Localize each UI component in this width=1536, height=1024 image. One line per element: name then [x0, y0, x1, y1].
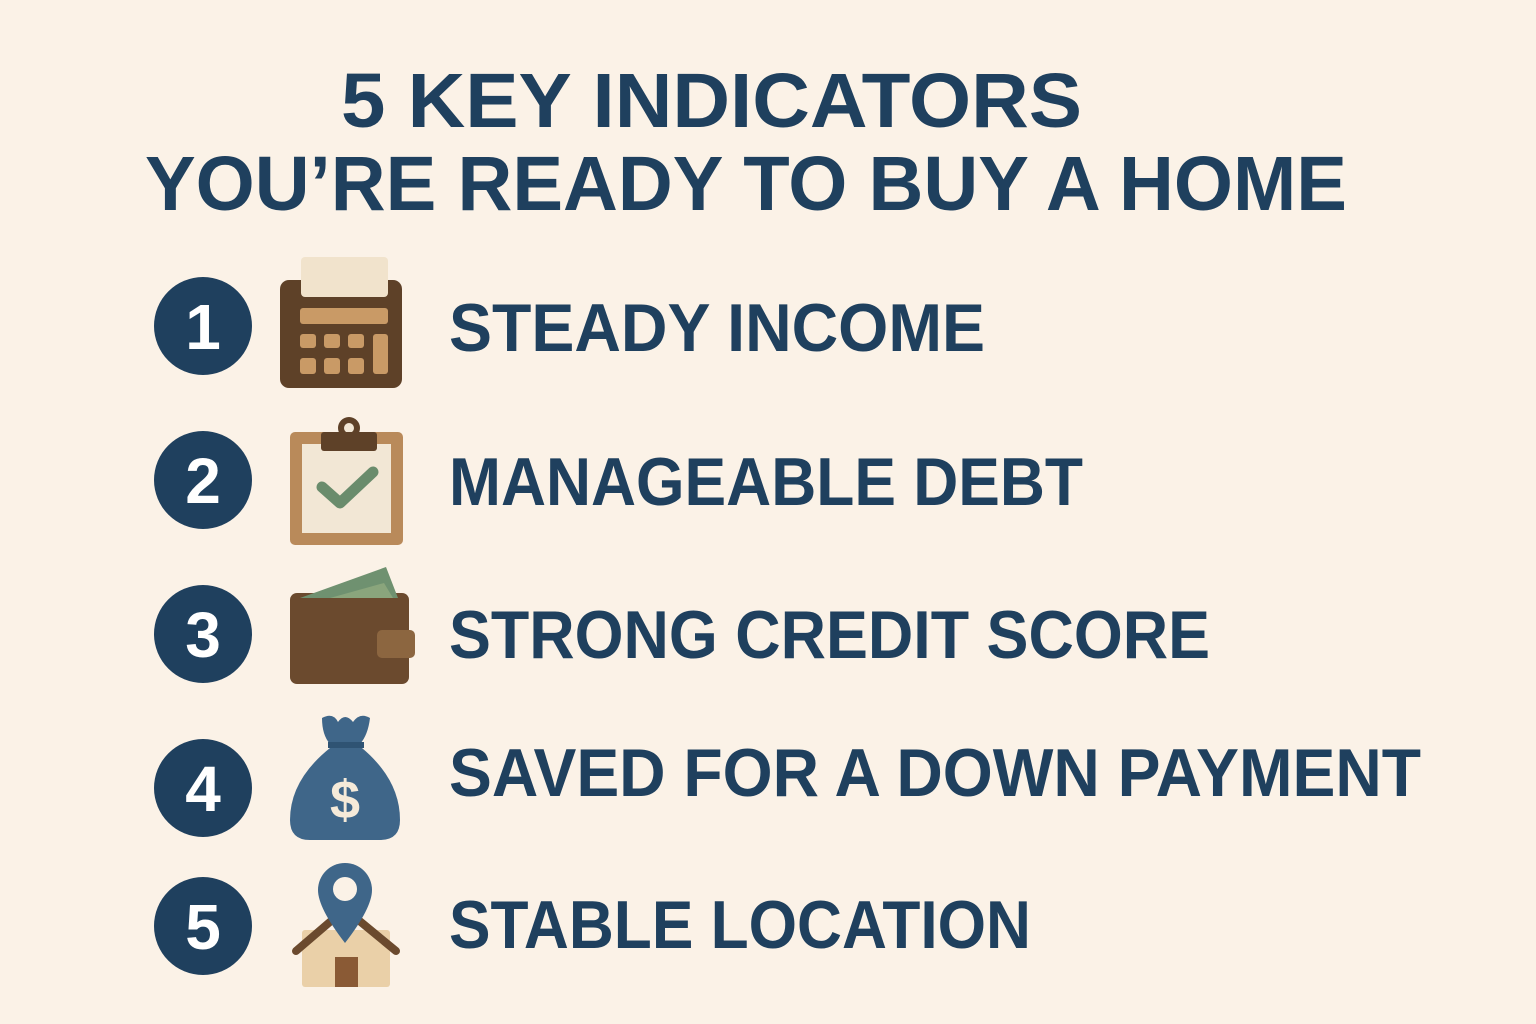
- item 2: manageable debt: [154, 417, 1083, 545]
- icon: clipboard: [290, 417, 403, 545]
- icon: money bag: [290, 716, 400, 840]
- title: [145, 58, 1347, 227]
- number badge 3: [154, 585, 252, 683]
- item 4: saved for a down payment: [154, 716, 1421, 840]
- item 5: stable location: [154, 863, 1031, 987]
- title: YOU’RE READY TO BUY A HOME: [145, 141, 1347, 227]
- label: stable location: STABLE LOCATION: [449, 887, 1031, 963]
- number badge 3: 3: [185, 599, 221, 671]
- label: strong credit score: STRONG CREDIT SCORE: [449, 597, 1210, 673]
- label: saved for a down payment: SAVED FOR A DOWN PAYMENT: [449, 735, 1421, 811]
- icon: house with pin: [296, 863, 396, 987]
- number badge 2: 2: [185, 445, 221, 517]
- number badge 2: [154, 431, 252, 529]
- icon: money bag: $: [330, 770, 360, 830]
- icon: calculator: [280, 257, 402, 388]
- number badge 4: 4: [185, 753, 221, 825]
- number badge 5: 5: [185, 891, 221, 963]
- number badge 5: [154, 877, 252, 975]
- title: 5 KEY INDICATORS: [341, 58, 1082, 144]
- number badge 1: 1: [185, 291, 221, 363]
- number badge 4: [154, 739, 252, 837]
- item 3: strong credit score: [154, 567, 1210, 684]
- label: manageable debt: MANAGEABLE DEBT: [449, 444, 1083, 520]
- number badge 1: [154, 277, 252, 375]
- item 1: steady income: [154, 257, 985, 388]
- icon: wallet: [290, 567, 415, 684]
- label: steady income: STEADY INCOME: [449, 290, 985, 366]
